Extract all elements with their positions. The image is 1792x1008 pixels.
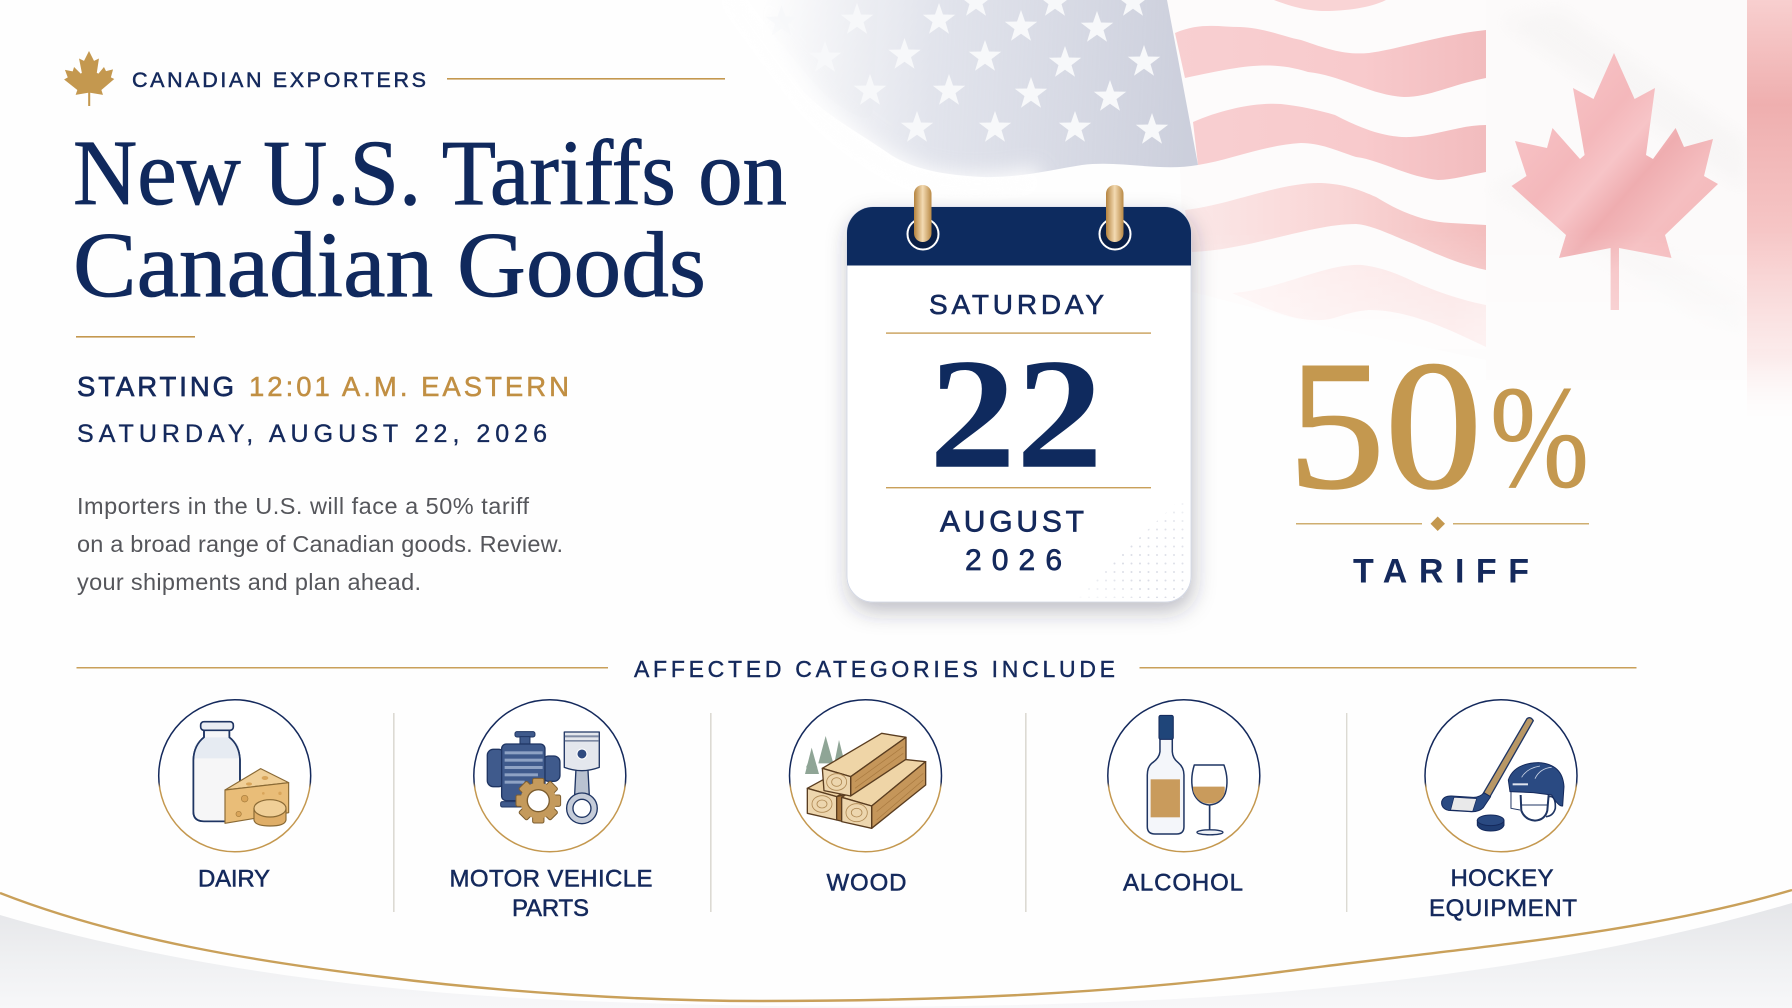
calendar header band: [847, 207, 1191, 266]
motor label: PARTS: [512, 895, 589, 922]
50% figure: [1288, 323, 1589, 527]
dairy circle: [159, 700, 311, 852]
motor circle: [474, 700, 626, 852]
ornament rule: [1296, 516, 1589, 531]
American flag: stripe four: [1232, 265, 1595, 347]
alcohol label: ALCOHOL: [1123, 870, 1243, 897]
icon: motor, gear and piston: [487, 732, 599, 824]
Canadian flag: maple leaf: [1512, 53, 1718, 310]
title: New U.S. Tariffs on: [73, 122, 787, 225]
gold curve: [0, 890, 1792, 1001]
eyebrow text: CANADIAN EXPORTERS: [132, 68, 426, 92]
motor label: MOTOR VEHICLE: [450, 866, 652, 893]
body text: Importers in the U.S. will face a 50% tariff: [77, 493, 529, 519]
start time: 12:01 A.M. EASTERN: [249, 371, 569, 402]
header: eyebrow: [64, 51, 725, 106]
hockey label: [1429, 865, 1577, 922]
category dividers: [393, 713, 1347, 912]
dairy label: DAIRY: [198, 866, 270, 893]
weekday: SATURDAY: [929, 289, 1104, 320]
American flag: stripe three: [1185, 183, 1486, 270]
icon: stick, puck and helmet: [1442, 718, 1564, 831]
category: hockey equipment: [1425, 700, 1577, 922]
category: motor vehicle parts: [450, 700, 652, 922]
calendar: [847, 185, 1191, 602]
title: Canadian Goods: [73, 214, 706, 317]
50% figure: 50: [1288, 323, 1482, 527]
tariff label: TARIFF: [1353, 553, 1529, 591]
eyebrow rule: [447, 78, 725, 80]
category: wood: [790, 700, 942, 897]
start time: STARTING: [77, 371, 234, 402]
affected categories heading: AFFECTED CATEGORIES INCLUDE: [634, 656, 1115, 682]
alcohol circle: [1108, 700, 1260, 852]
category: alcohol: [1108, 700, 1260, 897]
body text: [77, 493, 563, 595]
bottom swoosh: [0, 890, 1792, 1008]
right binder ring: [1100, 185, 1130, 250]
American flag: soft white field: [1167, 0, 1595, 360]
motor label: [450, 866, 652, 922]
icon: stacked lumber and trees: [805, 733, 926, 828]
50 percent tariff: [1288, 323, 1589, 591]
body text: your shipments and plan ahead.: [77, 569, 421, 595]
Canadian flag: red band: [1747, 0, 1792, 420]
left binder ring: [908, 185, 938, 250]
wood label: WOOD: [826, 870, 906, 897]
day number: 22: [929, 327, 1103, 502]
title rule: [76, 336, 195, 338]
American flag: stripe one: [1175, 26, 1486, 97]
American flag: canton with stars: [725, 0, 1198, 188]
American flag: stripe two: [1193, 104, 1486, 180]
50% figure: %: [1490, 356, 1589, 518]
calendar dot texture: [1088, 503, 1184, 598]
icon: wine bottle and glass: [1147, 715, 1227, 835]
Canadian flag: white band: [1486, 305, 1539, 347]
calendar page: [847, 207, 1191, 602]
start time: [77, 371, 569, 448]
body text: on a broad range of Canadian goods. Review.: [77, 531, 563, 557]
title: [73, 122, 787, 317]
Canadian flag: soft fold shading: [1490, 10, 1745, 340]
start time: SATURDAY, AUGUST 22, 2026: [77, 420, 547, 448]
month and year: [940, 506, 1084, 577]
icon: gold maple leaf: [64, 51, 114, 106]
hockey label: EQUIPMENT: [1429, 895, 1577, 922]
background flags: [804, 0, 1792, 383]
hockey circle: [1425, 700, 1577, 852]
month and year: AUGUST: [940, 506, 1084, 539]
wood circle: [790, 700, 942, 852]
icon: milk bottle and cheese: [193, 722, 289, 826]
month and year: 2026: [965, 544, 1062, 577]
American flag: top stripe: [1274, 0, 1386, 11]
category: dairy: [159, 700, 311, 893]
hockey label: HOCKEY: [1450, 865, 1554, 892]
